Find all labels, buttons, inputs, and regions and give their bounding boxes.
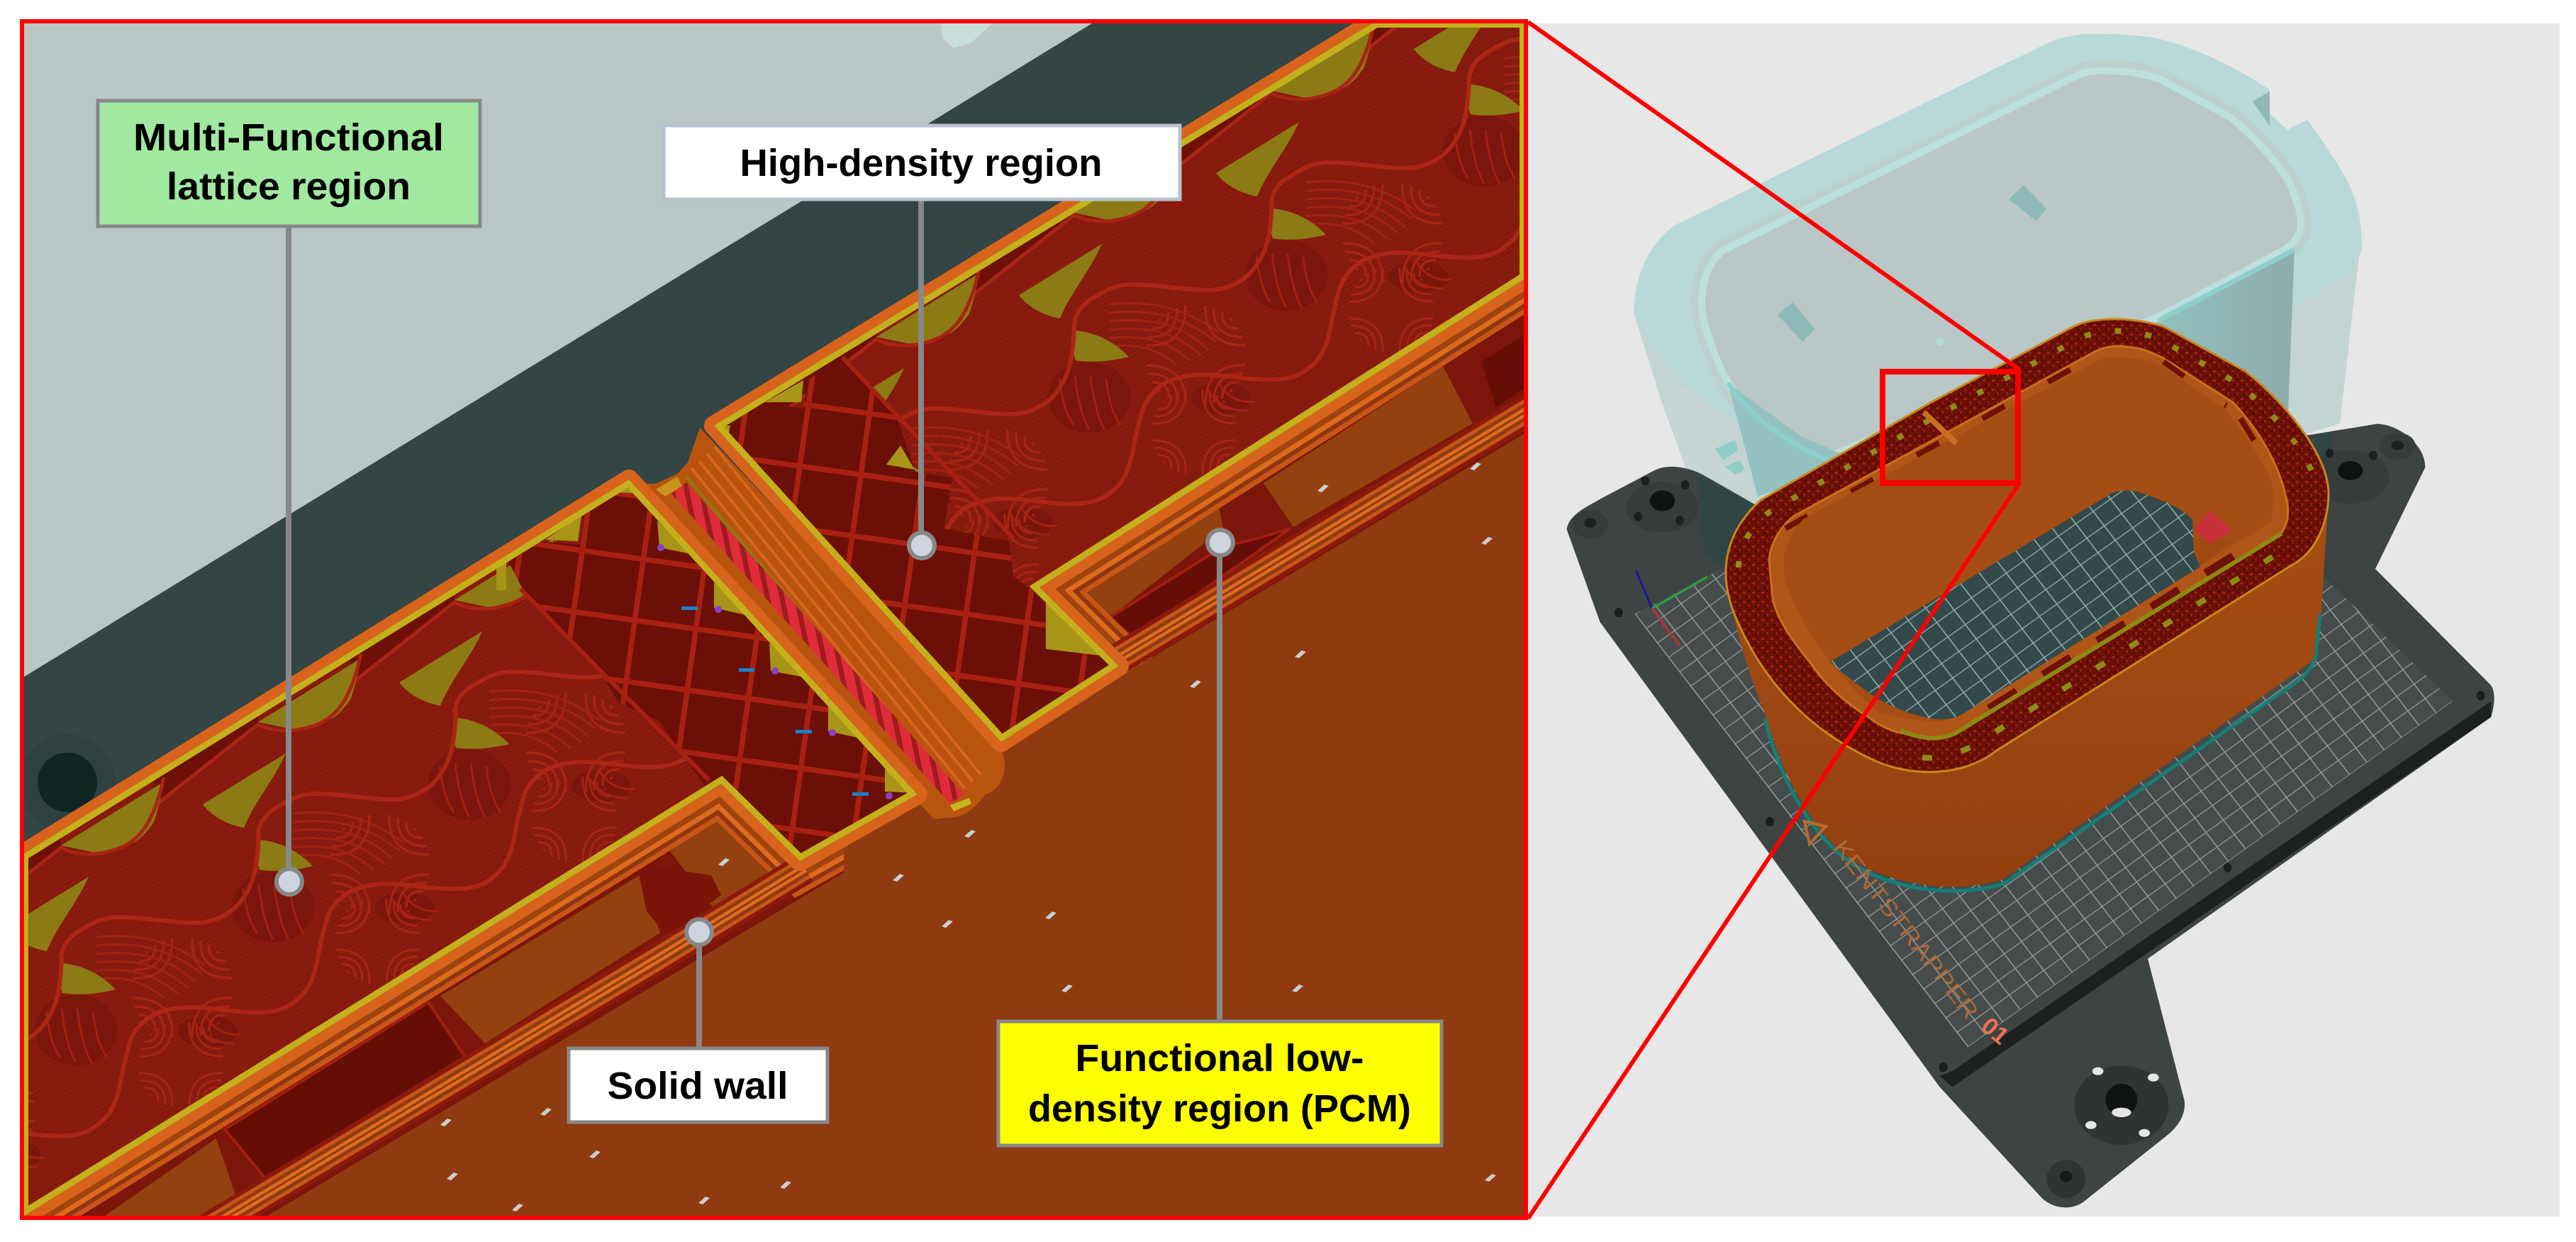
ring olive speckles front track bbox=[1922, 557, 2273, 758]
panel: 3D print overview bbox=[1524, 23, 2560, 1216]
printed part outer wall bbox=[1726, 494, 2329, 887]
wall bands under yellow B bbox=[1079, 309, 1524, 665]
mount: right large bbox=[2309, 448, 2389, 504]
cup lip bbox=[1634, 34, 2362, 489]
solid outer wall surface bbox=[267, 434, 1524, 1216]
lower wall bands B bbox=[1106, 391, 1560, 666]
callout: multi-functional lattice region: lattice region bbox=[167, 165, 411, 208]
callout: solid wall: Solid wall bbox=[607, 1065, 788, 1107]
region: multi-functional lattice strip A bbox=[24, 479, 918, 1216]
plate screws bbox=[1615, 608, 2485, 1072]
zoom connector lines bbox=[1528, 22, 2019, 1219]
plate tinted behind cup, right bbox=[2314, 432, 2331, 507]
mount: bottom small bbox=[2046, 1160, 2085, 1198]
lattice edge diagonal A bbox=[520, 589, 709, 780]
panel: zoomed lattice detail bbox=[24, 23, 1524, 1216]
skirt outline bbox=[1765, 614, 2320, 891]
inner wall bbox=[1783, 357, 2274, 722]
mount: right small bbox=[2380, 433, 2416, 460]
cup lower tabs bbox=[1715, 440, 1745, 475]
low-density brown section 1 bbox=[440, 875, 660, 1043]
low-density brown section 3 bbox=[670, 821, 769, 906]
lattice edge diagonal B bbox=[842, 357, 1013, 538]
ring olive speckles outer track bbox=[1739, 331, 2317, 567]
cup clip left bbox=[1778, 302, 1815, 342]
callout: multi-functional lattice region bbox=[98, 101, 480, 894]
zoom source box bbox=[1883, 372, 2018, 483]
yellow fillets A bbox=[496, 481, 918, 793]
dark bed band bbox=[24, 23, 1353, 842]
cup notch tab bbox=[2253, 92, 2270, 126]
floor with grid visible through hole bbox=[1830, 491, 2200, 719]
callout: high-density region bbox=[664, 126, 1180, 558]
pocket: lower-left low-density region bbox=[43, 796, 844, 1216]
plate tinted behind cup, left bbox=[1697, 475, 1759, 570]
lattice grid B bbox=[709, 348, 1134, 752]
cup left inner wall bbox=[1728, 383, 1858, 497]
inner band bbox=[1769, 346, 2288, 738]
zoom frame bbox=[22, 21, 1526, 1218]
yellow wall edge A bbox=[22, 479, 918, 1217]
callout: multi-functional lattice region: Multi-Functional bbox=[133, 116, 444, 159]
yellow wall edge B bbox=[714, 21, 1526, 742]
low-density brown section B1 bbox=[1087, 508, 1223, 616]
red hatched band bbox=[671, 482, 964, 804]
recess section B3 bbox=[1482, 333, 1526, 408]
recess section B bbox=[1109, 528, 1290, 638]
callout: functional low-density region (PCM) bbox=[998, 530, 1442, 1146]
overview background bbox=[1524, 23, 2560, 1216]
small tower bbox=[2194, 510, 2233, 565]
plate number: 01 bbox=[1976, 1012, 2014, 1050]
surface speckles bbox=[440, 462, 1496, 1211]
printed part top surface bbox=[1726, 319, 2329, 772]
lower wall bands A bbox=[177, 868, 805, 1242]
bed screw hole bbox=[38, 753, 97, 812]
cup rim groove bbox=[1705, 74, 2297, 453]
wall bands under yellow bbox=[71, 815, 844, 1216]
pocket: upper-right low-density region bbox=[1055, 291, 1524, 674]
mount: left small bbox=[1572, 510, 1608, 539]
low-density brown section 2 bbox=[103, 1138, 237, 1220]
callout: functional low-density region (PCM): density region (PCM) bbox=[1028, 1087, 1411, 1130]
transparent cup lower walls bbox=[1634, 213, 2360, 511]
outer orange edge of strips bbox=[22, 21, 1526, 1217]
pale object at top edge bbox=[940, 23, 993, 48]
plate logo bbox=[1805, 821, 1826, 844]
light background area bbox=[24, 23, 1092, 677]
inner band dark pockets front bbox=[1978, 557, 2234, 716]
cup rim highlight bbox=[1705, 74, 2297, 453]
tool marks blue A bbox=[681, 606, 869, 796]
mount: bottom large bbox=[2074, 1065, 2168, 1145]
low-density brown section B2 bbox=[1264, 366, 1473, 527]
seam on ring bbox=[1924, 412, 1956, 443]
seam end pieces bbox=[656, 477, 682, 497]
recess section 1 bbox=[225, 1002, 465, 1178]
callout: solid wall bbox=[569, 919, 827, 1122]
yellow fillets B bbox=[714, 380, 1099, 655]
region: high-density strip B bbox=[674, 0, 1736, 759]
inner olive line bbox=[1900, 533, 2282, 738]
tool marks purple A bbox=[657, 544, 893, 799]
cup left tab region bbox=[1663, 387, 1755, 490]
cup tray edge teal line bbox=[1728, 250, 2295, 461]
print bed grid bbox=[1634, 570, 2453, 1048]
axis gizmo bbox=[1636, 570, 1707, 645]
plate brand text: KENTSTRAPPER bbox=[1828, 835, 1984, 1024]
cup right inner wall bbox=[2127, 250, 2295, 433]
center seam band bbox=[642, 428, 1005, 819]
inner band dark pockets back bbox=[1785, 356, 2280, 528]
lattice grid A bbox=[508, 479, 918, 861]
print bed plate with arms bbox=[1567, 424, 2494, 1207]
plate front edge bbox=[1940, 702, 2491, 1087]
mount: left large bbox=[1627, 476, 1698, 533]
rib bbox=[640, 871, 721, 924]
cup small dot bbox=[1936, 337, 1944, 345]
cup clip right bbox=[2009, 185, 2046, 221]
callout: high-density region: High-density region bbox=[740, 142, 1102, 184]
cup inner tray bbox=[1705, 74, 2297, 453]
callout: functional low-density region (PCM): Functional low- bbox=[1075, 1037, 1364, 1080]
